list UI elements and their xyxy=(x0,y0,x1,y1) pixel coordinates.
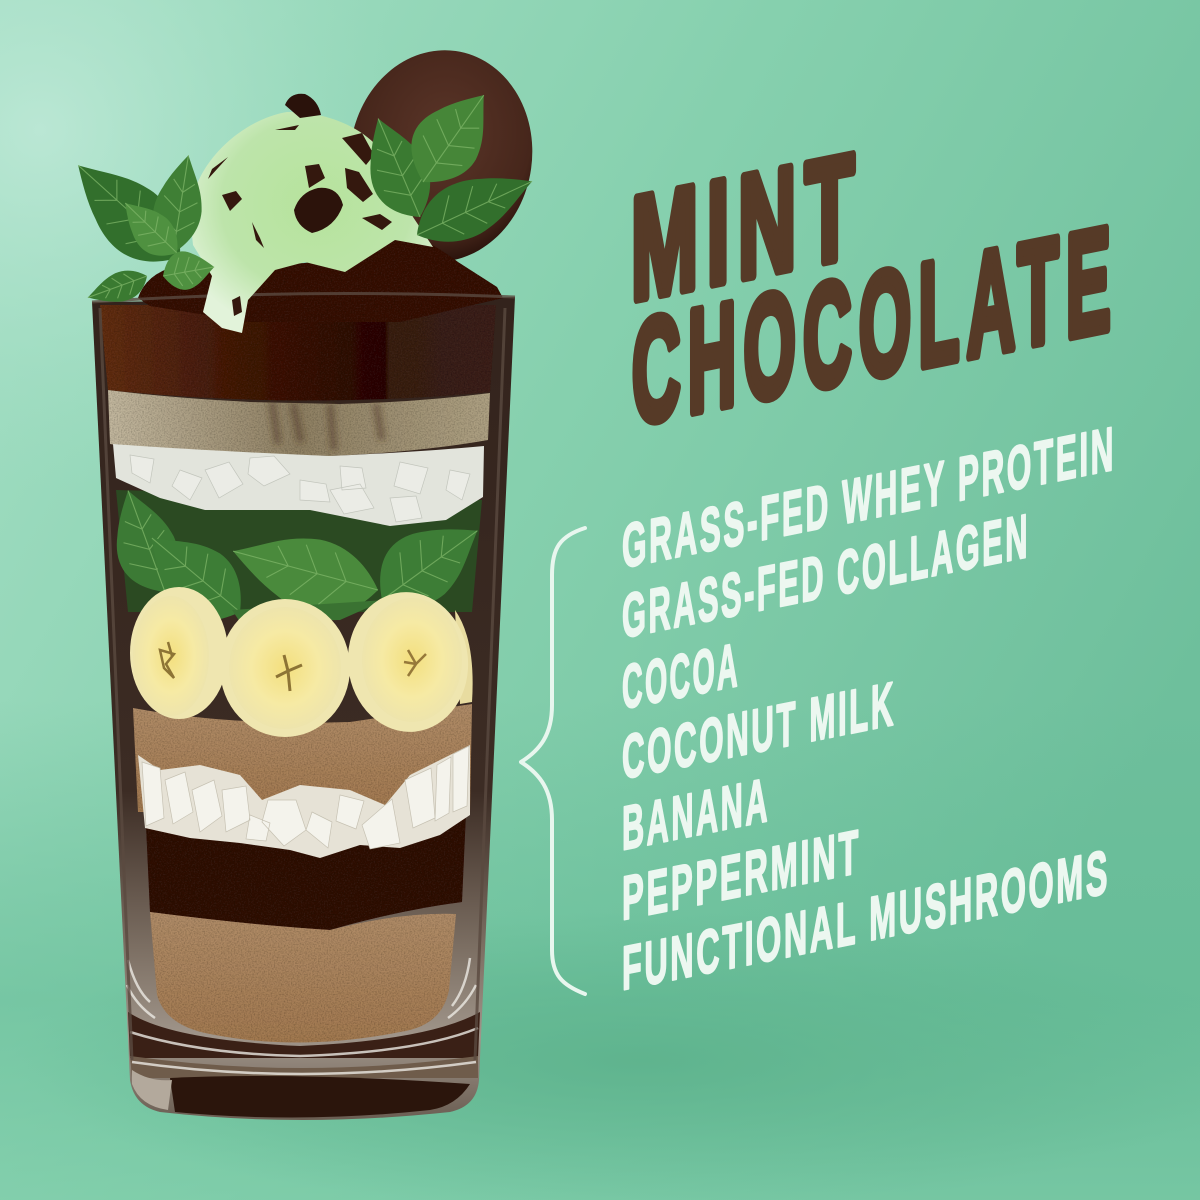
layer: banana slices xyxy=(130,586,475,738)
ingredient: PEPPERMINT xyxy=(622,817,861,934)
ingredient: COCONUT MILK xyxy=(622,669,896,793)
glass base with highlights xyxy=(127,958,480,1118)
glass parfait illustration xyxy=(54,38,546,1120)
icons: mint sprigs xyxy=(54,74,543,313)
layer: top chocolate xyxy=(100,305,496,401)
layer: mint leaves xyxy=(98,481,496,641)
layer: dark chocolate xyxy=(146,812,466,930)
icon: banana slice left xyxy=(130,587,228,719)
layer: coconut flakes xyxy=(138,745,470,858)
icon: banana slice centre xyxy=(220,599,350,737)
heading: Mint Chocolate xyxy=(631,123,1118,456)
ingredients list: COCOA xyxy=(622,630,740,723)
icon: mint ice cream scoop xyxy=(190,94,433,333)
icon: chocolate cookie xyxy=(336,38,546,274)
icon: curly brace xyxy=(521,528,585,994)
glass rim xyxy=(92,293,515,1060)
layer: tan mousse xyxy=(133,704,472,812)
icon: banana slice right xyxy=(341,586,475,738)
ingredients list xyxy=(622,414,1116,1004)
layer: crumbled chocolate topping xyxy=(138,234,503,322)
heading line: Mint: MINT xyxy=(631,123,863,332)
ingredients list: BANANA xyxy=(622,765,770,864)
layer: bottom chocolate mousse xyxy=(150,912,456,1043)
layer: shredded coconut xyxy=(113,444,484,526)
layer: tan powder xyxy=(108,390,490,456)
glass body xyxy=(92,297,515,1120)
